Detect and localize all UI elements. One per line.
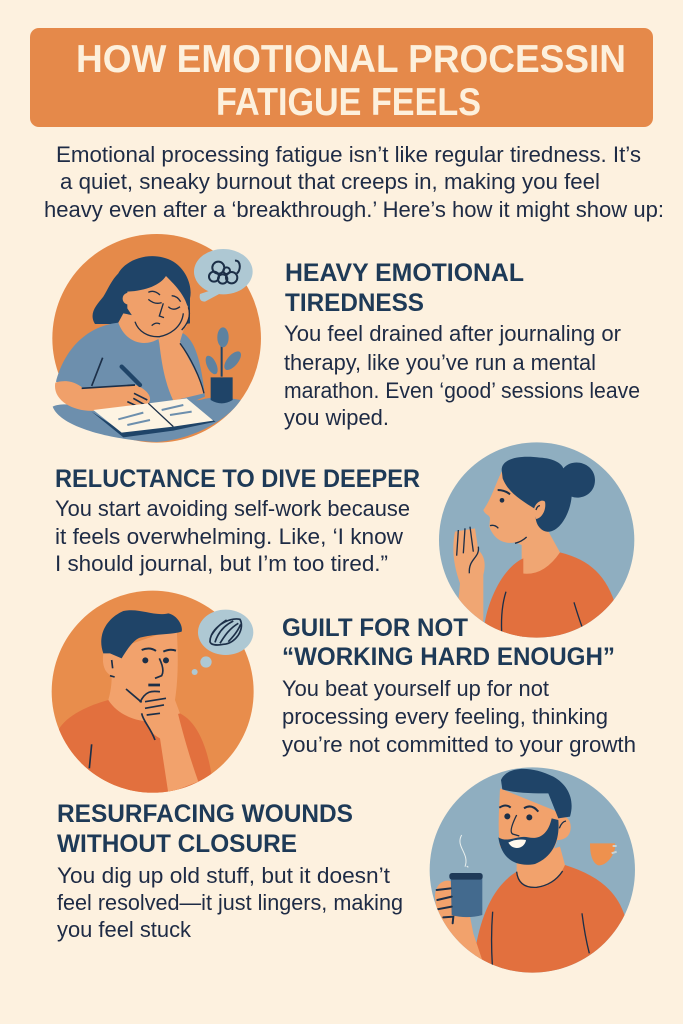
facial features [148,291,181,326]
heading: HEAVY EMOTIONAL [285,259,524,287]
icon: thought bubble with brain [192,610,253,675]
icon: man thinking [52,591,254,798]
panel: reluctance to dive deeper text [55,465,420,576]
heading [285,259,524,317]
body text: processing every feeling, thinking [282,704,608,729]
body text: therapy, like you’ve run a mental [284,350,596,375]
body text: You dig up old stuff, but it doesn’t [57,863,390,888]
table [53,397,241,442]
icon: woman in profile raising hand [439,442,634,648]
body text: You feel drained after journaling or [284,321,621,346]
body text [284,321,640,430]
intro text: Emotional processing fatigue isn’t like regular tiredness. It’s [56,142,641,167]
shirt [56,323,205,410]
neck and face [118,313,159,343]
heading: GUILT FOR NOT [282,614,468,642]
body text: it feels overwhelming. Like, ‘I know [55,524,403,549]
icon: thought bubble [194,249,253,302]
resting arm [158,305,204,401]
intro text: heavy even after a ‘breakthrough.’ Here’s how it might show up: [44,197,664,222]
intro text [44,142,664,222]
body text: you wiped. [284,405,389,430]
body text: I should journal, but I’m too tired.” [55,551,388,576]
body text [55,496,410,576]
book [92,412,216,437]
panel: heavy emotional tiredness text [284,259,640,430]
plant [211,377,233,403]
panel: resurfacing wounds text [57,800,403,942]
body text [57,863,403,942]
intro text: a quiet, sneaky burnout that creeps in, making you feel [60,169,600,194]
body text: You start avoiding self-work because [55,496,410,521]
body text: You beat yourself up for not [282,676,549,701]
heading: RELUCTANCE TO DIVE DEEPER [55,465,420,493]
icon: bearded man with coffee [430,767,635,980]
panel: guilt text [282,614,636,757]
heading [57,800,353,858]
heading: “WORKING HARD ENOUGH” [282,643,615,671]
title banner: FATIGUE FEELS [216,81,481,124]
heading [282,614,615,671]
icon: woman journaling [52,234,261,443]
heading: RESURFACING WOUNDS [57,800,353,828]
body text: marathon. Even ‘good’ sessions leave [284,378,640,403]
body text [282,676,636,757]
heading: TIREDNESS [285,289,424,317]
back hair [93,256,191,330]
title banner [30,28,653,127]
body text: you feel stuck [57,917,192,942]
heading: WITHOUT CLOSURE [57,830,297,858]
body text: you’re not committed to your growth [282,732,636,757]
title banner: HOW EMOTIONAL PROCESSIN [76,38,626,81]
writing arm [55,381,150,411]
body text: feel resolved—it just lingers, making [57,890,403,915]
